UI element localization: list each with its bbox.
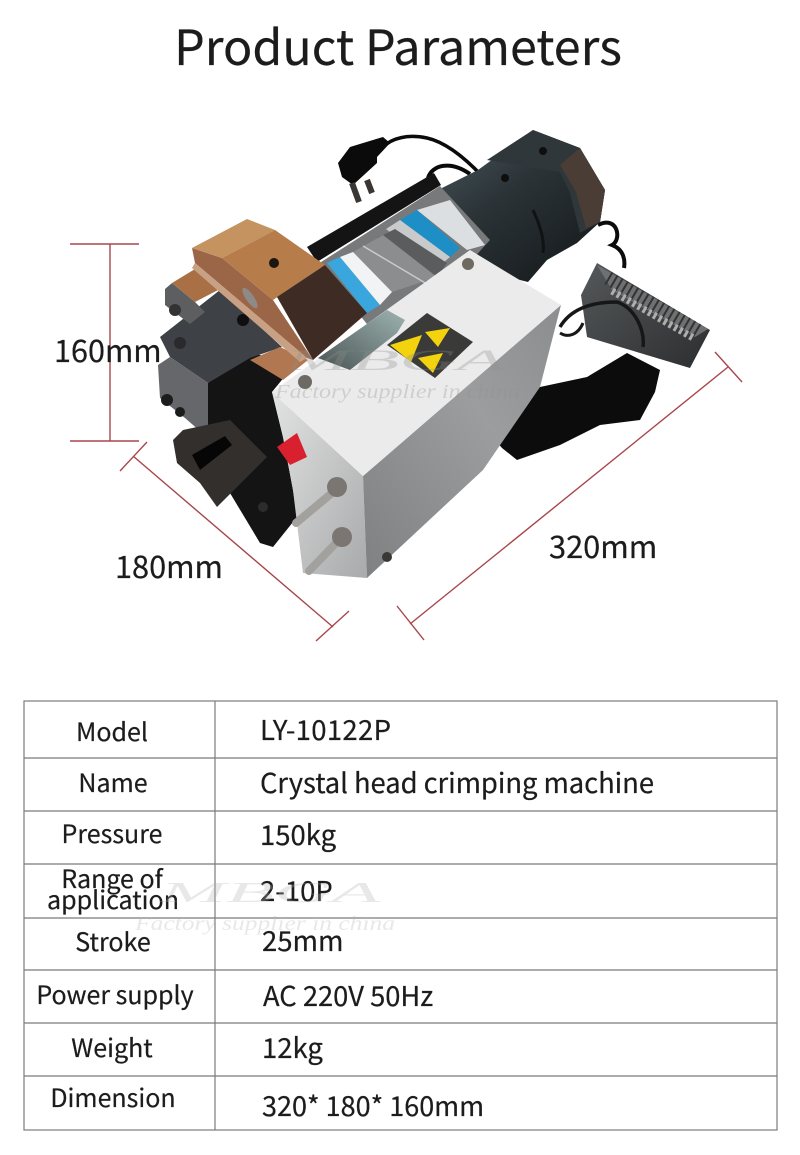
dimension: height 160mm: 160mm xyxy=(54,327,162,371)
dimension: width 180mm: 180mm xyxy=(115,542,223,587)
row: stroke: 25mm xyxy=(262,919,343,959)
model band xyxy=(386,220,450,268)
row: weight xyxy=(71,1026,323,1066)
row: model: Model xyxy=(76,713,148,749)
row: power supply xyxy=(36,974,433,1014)
gear housing panels xyxy=(377,229,447,277)
row: stroke xyxy=(75,919,343,959)
dimension: height 160mm xyxy=(54,244,162,441)
watermark on table: MBGA xyxy=(157,878,382,909)
lower metal clamp block xyxy=(158,283,282,438)
screws xyxy=(298,375,312,389)
foot pedal cable pile xyxy=(495,353,660,460)
warning label xyxy=(387,313,473,378)
watermark on table: Factory supplier in china xyxy=(134,913,395,935)
dimension: length 320mm: 320mm xyxy=(549,522,657,567)
motor cable loop xyxy=(598,223,624,268)
clamp and die silhouette xyxy=(205,350,297,547)
row: power supply: AC 220V 50Hz xyxy=(263,974,433,1014)
row: weight: Weight xyxy=(71,1029,153,1065)
gearbox with labels xyxy=(318,186,490,340)
translucent guard xyxy=(318,310,405,370)
motor data label xyxy=(417,200,485,250)
row: range of application: Range of xyxy=(61,860,164,896)
watermark on photo: Factory supplier in china xyxy=(274,381,520,403)
box top panel xyxy=(272,250,561,476)
box side with switches xyxy=(272,392,367,578)
blue band xyxy=(400,210,460,257)
watermark on table xyxy=(134,878,395,935)
watermark on photo: MBGA xyxy=(282,344,507,377)
row: model xyxy=(76,708,391,749)
row: name: Name xyxy=(78,764,148,800)
row: stroke: Stroke xyxy=(75,923,151,959)
row: name: Crystal head crimping machine xyxy=(260,761,654,801)
small bronze plates xyxy=(172,269,308,380)
row: range of application: application xyxy=(47,881,179,917)
motor xyxy=(438,130,605,282)
actuator rod xyxy=(307,173,441,262)
control box xyxy=(272,250,561,578)
row: name xyxy=(78,761,654,801)
foot pedal xyxy=(560,263,710,368)
row: pressure: Pressure xyxy=(62,815,162,851)
title: Product Parameters xyxy=(174,9,622,79)
row: pressure: 150kg xyxy=(260,813,337,853)
parameter table xyxy=(24,701,777,1130)
row: model: LY-10122P xyxy=(260,708,391,748)
row: range of application xyxy=(47,860,333,917)
watermark on photo xyxy=(274,344,520,403)
dimension: length 320mm xyxy=(397,352,742,640)
front label xyxy=(327,257,380,313)
box right panel xyxy=(363,305,561,578)
row: dimension xyxy=(50,1079,484,1124)
red button xyxy=(277,433,307,465)
dimension: width 180mm xyxy=(115,442,349,641)
power plug and cord xyxy=(338,136,482,202)
row: pressure xyxy=(62,813,337,853)
row: dimension: 320* 180* 160mm xyxy=(262,1085,484,1124)
row: weight: 12kg xyxy=(262,1026,323,1066)
product illustration: crimping machine xyxy=(158,130,710,578)
crimp die head xyxy=(173,420,268,512)
row: range of application: 2-10P xyxy=(260,869,333,909)
row: dimension: Dimension xyxy=(50,1079,176,1115)
row: power supply: Power supply xyxy=(36,976,194,1012)
bronze cover block xyxy=(192,219,367,362)
table grid xyxy=(24,701,777,1130)
toggle switches xyxy=(296,477,352,571)
